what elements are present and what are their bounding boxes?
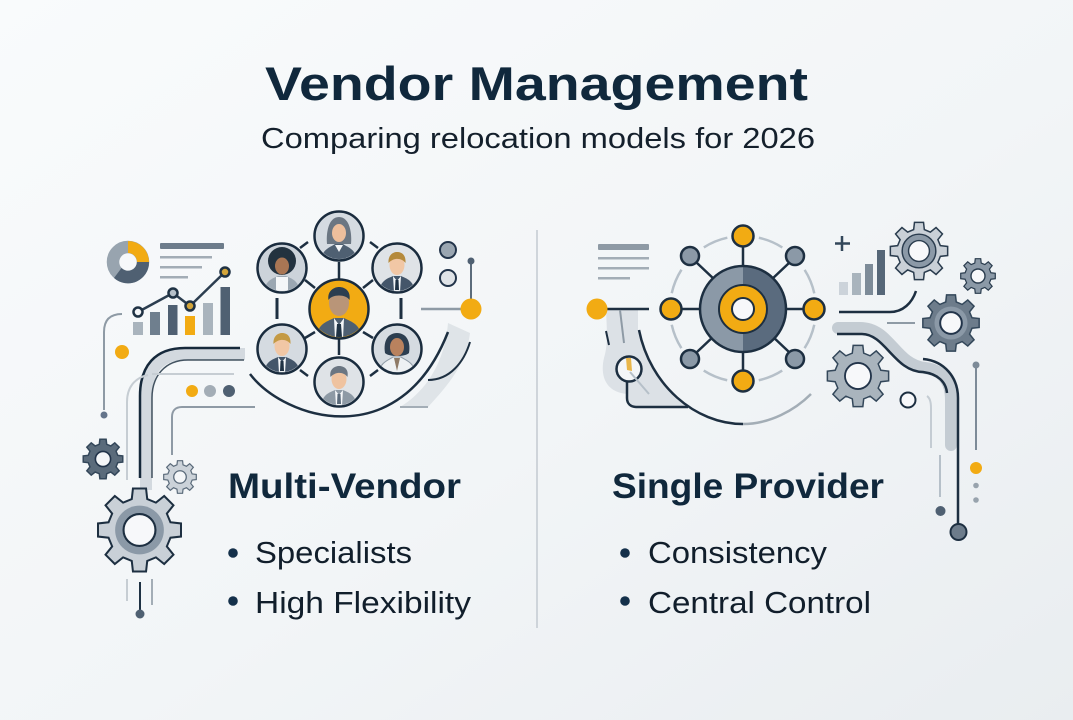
list: single provider: [620, 535, 871, 620]
left connector lines: [606, 309, 811, 424]
icon: gear small: [961, 259, 995, 293]
list: multi-vendor: Specialists: [255, 535, 412, 570]
legend lines: [160, 243, 224, 278]
list: multi-vendor: High Flexibility: [255, 585, 472, 620]
heading: single provider: Single Provider: [612, 467, 884, 506]
status dots: [186, 385, 235, 397]
pipe: [127, 348, 255, 490]
icon: gauge: [616, 356, 649, 394]
yellow connector: [421, 258, 482, 320]
icon: donut chart: [113, 241, 149, 283]
list: single provider: Central Control: [648, 585, 871, 620]
big arc: [250, 332, 470, 416]
pipe right: [837, 328, 966, 540]
icon: yellow dot: [586, 298, 608, 320]
network links: [277, 242, 401, 376]
panel: multi-vendor illustration: [83, 212, 482, 618]
title: Vendor Management: [265, 57, 808, 110]
bar chart: [133, 287, 230, 335]
icon: gear dark: [923, 295, 979, 351]
side nodes: [440, 242, 456, 286]
document lines: [598, 244, 649, 280]
pale blob: [603, 310, 690, 407]
hub: [700, 266, 786, 352]
icon: dark gear: [83, 439, 123, 479]
subtitle: Comparing relocation models for 2026: [261, 123, 815, 155]
panel: single provider illustration: [586, 222, 995, 540]
hub nodes: [660, 226, 824, 392]
connectors right: [839, 291, 916, 323]
icon: small gear: [164, 461, 196, 493]
person: top right: [372, 244, 422, 292]
icon: large gear: [98, 489, 181, 571]
sweep shape: [400, 323, 470, 407]
list: multi-vendor: [228, 535, 472, 620]
yellow dot: [115, 345, 129, 359]
person: bottom right: [372, 324, 422, 374]
person: top left: [258, 244, 306, 292]
connector below gear: [127, 579, 152, 618]
icon: gear top: [890, 222, 948, 280]
person: centre: [310, 280, 368, 339]
heading: multi-vendor: Multi-Vendor: [228, 467, 461, 506]
list: single provider: Consistency: [648, 535, 828, 570]
right detail lines and dots: [927, 362, 982, 516]
orbit ring: [670, 236, 816, 382]
person: bottom left: [258, 324, 306, 374]
line chart: [134, 268, 230, 316]
person: top: [314, 212, 364, 260]
small ring: [900, 392, 916, 408]
icon: plus: [835, 236, 850, 251]
icon: gear lower: [827, 345, 889, 407]
person: bottom: [314, 358, 364, 406]
hub spokes: [682, 247, 804, 371]
connector left: [100, 314, 122, 418]
bar chart: [839, 250, 885, 295]
